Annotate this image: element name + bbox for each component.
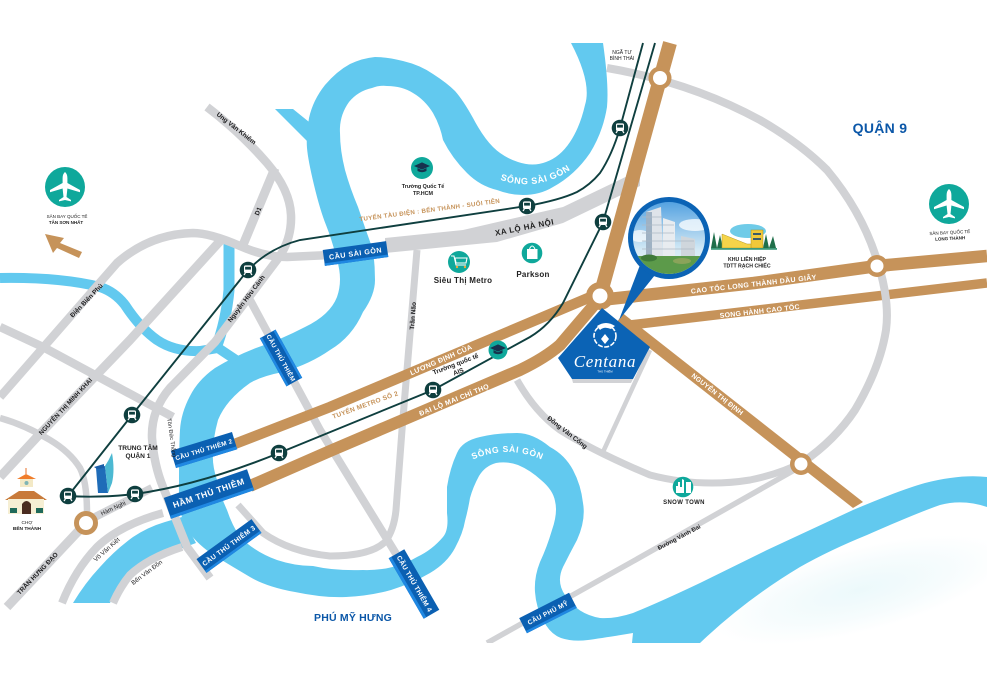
label: Sân bay Long Thành: SÂN BAY QUỐC TẾ xyxy=(929,228,970,236)
project: building photo pin xyxy=(619,197,711,320)
bridge: Cầu Thủ Thiêm 3 xyxy=(196,519,262,573)
label: Sân bay Tân Sơn Nhất: SÂN BAY QUỐC TẾ xyxy=(47,213,87,219)
road label: Đồng Văn Cống: Đồng Văn Cống xyxy=(546,413,590,451)
road: Cầu Thủ Thiêm 1 axis xyxy=(250,300,398,557)
line label: Tuyến tàu điện: TUYẾN TÀU ĐIỆN : BẾN THÀNH - SUỐI TIÊN xyxy=(359,197,501,223)
road: D1 xyxy=(243,168,275,245)
line label: Tuyến Metro số 2: TUYẾN METRO SỐ 2 xyxy=(331,388,399,421)
icon: Trường quốc tế AIS xyxy=(488,340,508,360)
bridge: Cầu Phú Mỹ: CẦU PHÚ MỸ xyxy=(525,597,570,627)
road label: Tôn Đức Thắng: Tôn Đức Thắng xyxy=(165,418,178,458)
river: Sông Sài Gòn main course xyxy=(179,43,987,643)
road: Võ Văn Kiệt xyxy=(62,513,163,603)
icon: airport Tân Sơn Nhất xyxy=(45,167,85,207)
road: Điện Biên Phủ and link xyxy=(0,233,330,397)
label: Trường quốc tế AIS xyxy=(432,352,483,384)
label: Sân bay Long Thành: LONG THÀNH xyxy=(935,234,965,242)
road label: Bến Vân Đồn: Bến Vân Đồn xyxy=(130,559,164,587)
station: Hàm Nghi xyxy=(127,486,143,502)
bridge: Cầu Thủ Thiêm 2: CẦU THỦ THIÊM 2 xyxy=(174,435,234,462)
project: Centana pentagon marker: Centana xyxy=(574,352,636,371)
station: Nhà hát xyxy=(124,407,140,423)
junction: Trần Hưng Đạo roundabout xyxy=(76,514,96,532)
metro line 2 xyxy=(68,43,655,497)
label: Trường quốc tế AIS: AIS xyxy=(452,367,466,377)
icon: Parkson xyxy=(522,243,542,263)
road: Ung Văn Khiêm and Nguyễn Hữu Cảnh xyxy=(152,107,291,578)
label: Trung tâm Quận 1: TRUNG TÂM xyxy=(118,443,158,452)
label: Siêu Thị Metro: Siêu Thị Metro xyxy=(434,276,492,285)
project: Centana pentagon marker: THỦ THIÊM xyxy=(597,368,613,374)
metro stations xyxy=(60,120,628,504)
label: Trung tâm Quận 1: QUẬN 1 xyxy=(126,451,151,460)
label: Snow Town: SNOW TOWN xyxy=(663,500,705,506)
road label: Đại lộ Mai Chí Thọ: ĐẠI LỘ MAI CHÍ THỌ xyxy=(418,381,491,418)
metro line: Bến Thành - Suối Tiên xyxy=(68,43,643,496)
map background glow xyxy=(704,513,987,667)
junction: south roundabout xyxy=(790,453,812,475)
icon: Siêu Thị Metro xyxy=(448,251,470,273)
junction: central roundabout xyxy=(586,282,614,310)
station: Thủ Thiêm xyxy=(271,445,287,461)
bridge: Cầu Thủ Thiêm 4: CẦU THỦ THIÊM 4 xyxy=(395,553,435,614)
bridge: Cầu Thủ Thiêm 3: CẦU THỦ THIÊM 3 xyxy=(200,522,257,568)
label: Trường quốc tế AIS: Trường quốc tế xyxy=(432,352,480,377)
label: Ngã tư Bình Thái: NGÃ TƯ xyxy=(612,49,632,56)
label: Khu liên hiệp TDTT Rạch Chiếc: TDTT RẠCH CHIẾC xyxy=(723,263,771,270)
river: lower left branch xyxy=(73,517,196,603)
road: Centana connector xyxy=(603,350,650,452)
label: Sân bay Long Thành xyxy=(929,228,971,242)
bridge: Hầm Thủ Thiêm: HẦM THỦ THIÊM xyxy=(171,475,246,510)
icon: Trường Quốc Tế TP.HCM xyxy=(411,157,433,179)
river: upper left branch xyxy=(275,109,308,141)
road label: Song hành cao tốc: SONG HÀNH CAO TỐC xyxy=(719,301,800,320)
icon: Bitexco tower xyxy=(94,453,114,493)
road: Lê Duẩn xyxy=(0,327,173,417)
label: Phú Mỹ Hưng: PHÚ MỸ HƯNG xyxy=(314,611,392,624)
river label: Sông Sài Gòn upper: SÔNG SÀI GÒN xyxy=(500,165,570,184)
road: inner city curve xyxy=(0,418,87,513)
tan main roads xyxy=(76,43,987,532)
label: Chợ Bến Thành: CHỢ xyxy=(21,520,33,526)
station: Ba Son xyxy=(240,262,256,278)
metro lines xyxy=(68,43,655,497)
bridge: Cầu Thủ Thiêm 4 xyxy=(389,549,439,619)
road label: Trần Hưng Đạo: TRẦN HƯNG ĐẠO xyxy=(14,549,60,597)
river: city canal xyxy=(0,278,236,360)
road label: Nguyễn Hữu Cảnh: Nguyễn Hữu Cảnh xyxy=(225,273,267,324)
label: Ngã tư Bình Thái: BÌNH THÁI xyxy=(610,55,634,62)
river: vertical canal xyxy=(216,243,229,348)
label: Parkson: Parkson xyxy=(516,270,550,279)
icon: airport Long Thành xyxy=(929,184,969,224)
road label: Ung Văn Khiêm: Ung Văn Khiêm xyxy=(215,111,257,146)
bridge: Cầu Thủ Thiêm 2 xyxy=(171,432,237,468)
road: Song Hành Cao Tốc (under ring) xyxy=(630,283,987,325)
road: Trần Não xyxy=(238,250,417,556)
label: Trường Quốc Tế TP.HCM: TP.HCM xyxy=(413,191,433,197)
icon: Snow Town xyxy=(673,477,693,497)
road: Đường Vành Đai xyxy=(487,468,798,643)
road label: Võ Văn Kiệt: Võ Văn Kiệt xyxy=(93,536,122,563)
bridge: Cầu Thủ Thiêm: CẦU THỦ THIÊM xyxy=(265,333,297,383)
station: Rạch Chiếc xyxy=(595,214,611,230)
road: ring top arc xyxy=(607,68,887,462)
icon: KHU LIÊN HIỆP stadium xyxy=(711,224,777,250)
label: Trường Quốc Tế TP.HCM: Trường Quốc Tế xyxy=(402,183,444,190)
road: Cao tốc Long Thành Dầu Giây xyxy=(600,256,987,300)
label: Sân bay Tân Sơn Nhất: TÂN SƠN NHẤT xyxy=(49,219,83,225)
station: Mai Chí Thọ xyxy=(425,382,441,398)
road: Đại lộ Mai Chí Thọ xyxy=(250,298,600,486)
bridge: Cầu Sài Gòn xyxy=(323,241,388,266)
road: Hàm Nghi xyxy=(93,488,152,518)
road label: D1: D1 xyxy=(254,206,264,217)
road label: Đường Vành Đai: Đường Vành Đai xyxy=(657,524,702,552)
station: Thảo Điền xyxy=(519,198,535,214)
road: Lương Định Của xyxy=(232,293,600,445)
bridge: Cầu Sài Gòn: CẦU SÀI GÒN xyxy=(328,244,383,262)
road: north axis xyxy=(600,43,670,296)
road: Bến Vân Đồn xyxy=(113,547,182,603)
bridge: Cầu Thủ Thiêm xyxy=(260,330,302,386)
project: Centana pentagon marker xyxy=(558,308,650,383)
label: Quận 9: QUẬN 9 xyxy=(853,119,907,136)
road label: Hàm Nghi: Hàm Nghi xyxy=(100,501,127,517)
arrow: towards Tân Sơn Nhất xyxy=(45,234,82,258)
road: ring lower arc xyxy=(517,380,803,483)
road: Nguyễn Thị Minh Khai xyxy=(0,240,221,477)
road label: Nguyễn Thị Định: NGUYỄN THỊ ĐỊNH xyxy=(690,371,745,417)
road label: Lương Định Của: LƯƠNG ĐỊNH CỦA xyxy=(409,342,473,377)
road: Nguyễn Thị Định xyxy=(617,314,863,508)
junction: east roundabout xyxy=(867,255,886,277)
road label: Nguyễn Thị Minh Khai: NGUYỄN THỊ MINH KHAI xyxy=(36,376,94,437)
road: Trần Hưng Đạo xyxy=(7,523,86,607)
bridge: Cầu Phú Mỹ xyxy=(519,593,577,633)
river label: Sông Sài Gòn lower: SÔNG SÀI GÒN xyxy=(472,444,544,460)
icon: Chợ Bến Thành xyxy=(5,468,47,514)
station: Bến Thành xyxy=(60,488,76,504)
road label: Xa lộ Hà Nội: XA LỘ HÀ NỘI xyxy=(494,217,555,238)
road label: Điện Biên Phủ: Điện Biên Phủ xyxy=(69,283,105,319)
station: Bình Thái xyxy=(612,120,628,136)
label: Khu liên hiệp TDTT Rạch Chiếc: KHU LIÊN HIỆP xyxy=(728,255,767,263)
road: Xa lộ Hà Nội xyxy=(385,170,640,253)
label: Chợ Bến Thành: BẾN THÀNH xyxy=(13,525,42,532)
junction: north roundabout xyxy=(648,66,672,90)
road label: Trần Não: Trần Não xyxy=(407,302,418,330)
bridge: Hầm Thủ Thiêm xyxy=(164,469,254,519)
road label: Cao tốc Long Thành Dầu Giây: CAO TỐC LONG THÀNH DẦU GIÂY xyxy=(690,271,817,296)
